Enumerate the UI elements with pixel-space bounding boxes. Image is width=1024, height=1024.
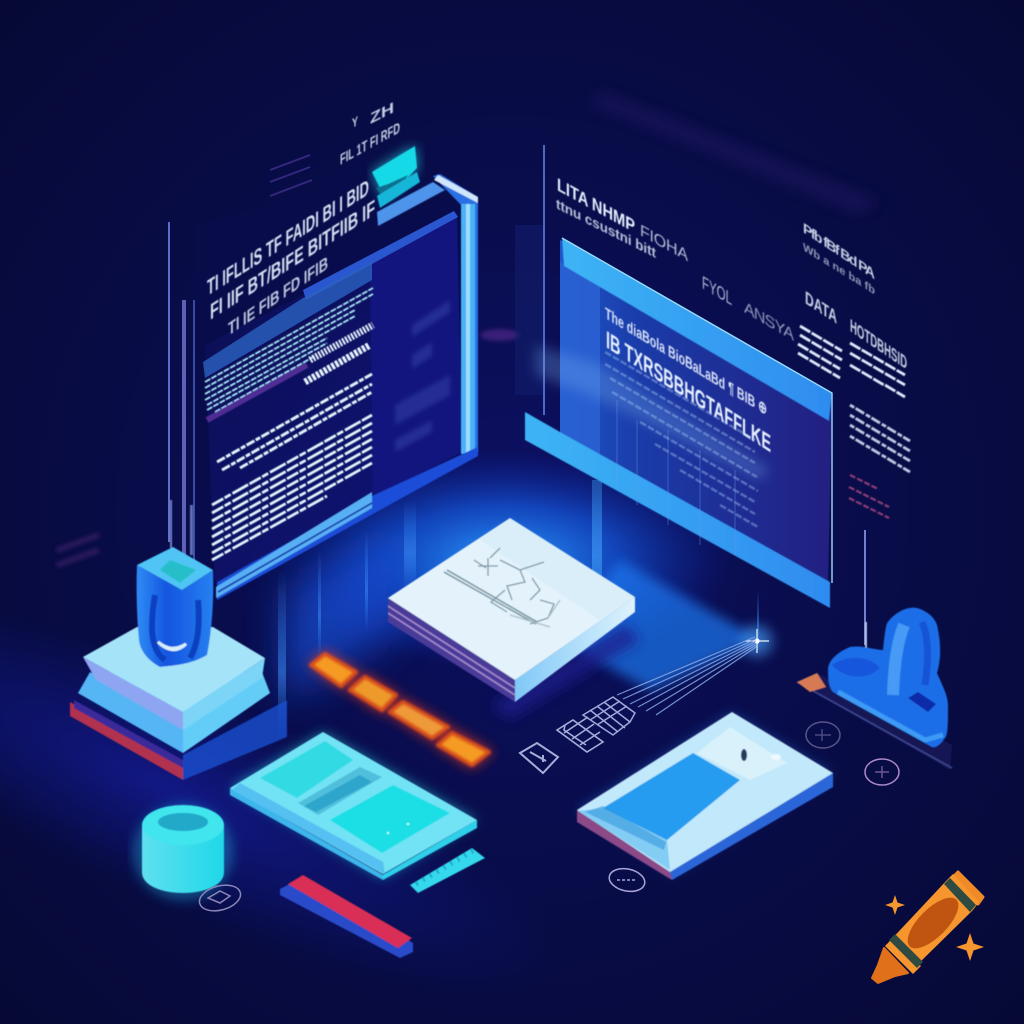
icon: card — [520, 743, 558, 773]
panel: left screen — [168, 100, 478, 600]
right text columns: Wb a ne ba fb — [803, 240, 875, 297]
red bar — [280, 875, 413, 958]
white sticker — [697, 727, 787, 780]
wires and chip icons — [520, 625, 773, 773]
header text above right screen: ANSYA — [744, 297, 794, 345]
right text columns — [798, 220, 910, 518]
left screen heading text: Y — [352, 114, 358, 131]
cyan tablet device — [230, 732, 477, 880]
left screen text block: TI IE FIB FD IFIB — [228, 253, 328, 341]
left screen heading text: ZH — [370, 100, 394, 128]
header text above right screen: FYOL — [702, 272, 732, 310]
cyan cylinder — [133, 804, 233, 900]
hazy glow band — [535, 345, 770, 480]
bottom frame — [216, 447, 478, 600]
cyan ruler — [410, 848, 485, 893]
faded purple list — [270, 155, 312, 196]
right screen body text — [605, 352, 758, 527]
small circular badges — [197, 722, 899, 915]
header text above right screen: FIOHA — [640, 220, 689, 265]
right screen title text: The diaBola BioBaLaBd ¶ BIB ⊕ — [605, 303, 767, 419]
book with tree sketch — [388, 518, 635, 702]
left screen heading text: FIL 1T FI RFD — [340, 119, 400, 169]
right screen title text: IB TXRSBBHGTAFFLKE — [606, 325, 771, 458]
right frame — [377, 174, 478, 455]
blue statue on plate — [797, 608, 952, 770]
right text columns: Pfb fBf Bd PA — [803, 220, 875, 283]
left screen text block — [207, 175, 375, 341]
teal screens — [260, 741, 353, 798]
tree sketch — [444, 548, 560, 627]
header text above right screen — [556, 175, 794, 345]
pedestal with blue cube — [70, 500, 287, 780]
right text columns: DATA — [805, 288, 837, 328]
header text above right screen: LITA NHMP — [557, 175, 635, 238]
right faded labels — [395, 300, 450, 452]
right text columns: HOTDBHSID — [850, 316, 907, 374]
icon: grid — [557, 717, 603, 752]
right device — [577, 712, 833, 880]
icon: chip — [583, 697, 635, 735]
blue cube — [137, 547, 213, 667]
header text above right screen: ttnu csustni bitt — [556, 197, 656, 262]
blue header band — [203, 262, 372, 378]
vertical chart ticks — [617, 400, 735, 555]
orange key row — [308, 650, 494, 769]
left screen heading text — [340, 100, 400, 169]
right screen title text — [605, 303, 771, 458]
panel: right screen — [515, 145, 910, 645]
left screen text block: FI IIF BT/BIFE BITFIIB IF — [210, 195, 375, 325]
icon: teal cap — [372, 146, 420, 208]
left screen data rows — [205, 288, 373, 560]
left frame lines — [168, 222, 195, 570]
left screen text block: TI IFLLIS TF FAIDI BI I BID — [207, 175, 369, 301]
top blue bar — [303, 211, 458, 300]
floor glow beneath book — [275, 450, 762, 740]
icon: crayon logo — [872, 872, 984, 983]
